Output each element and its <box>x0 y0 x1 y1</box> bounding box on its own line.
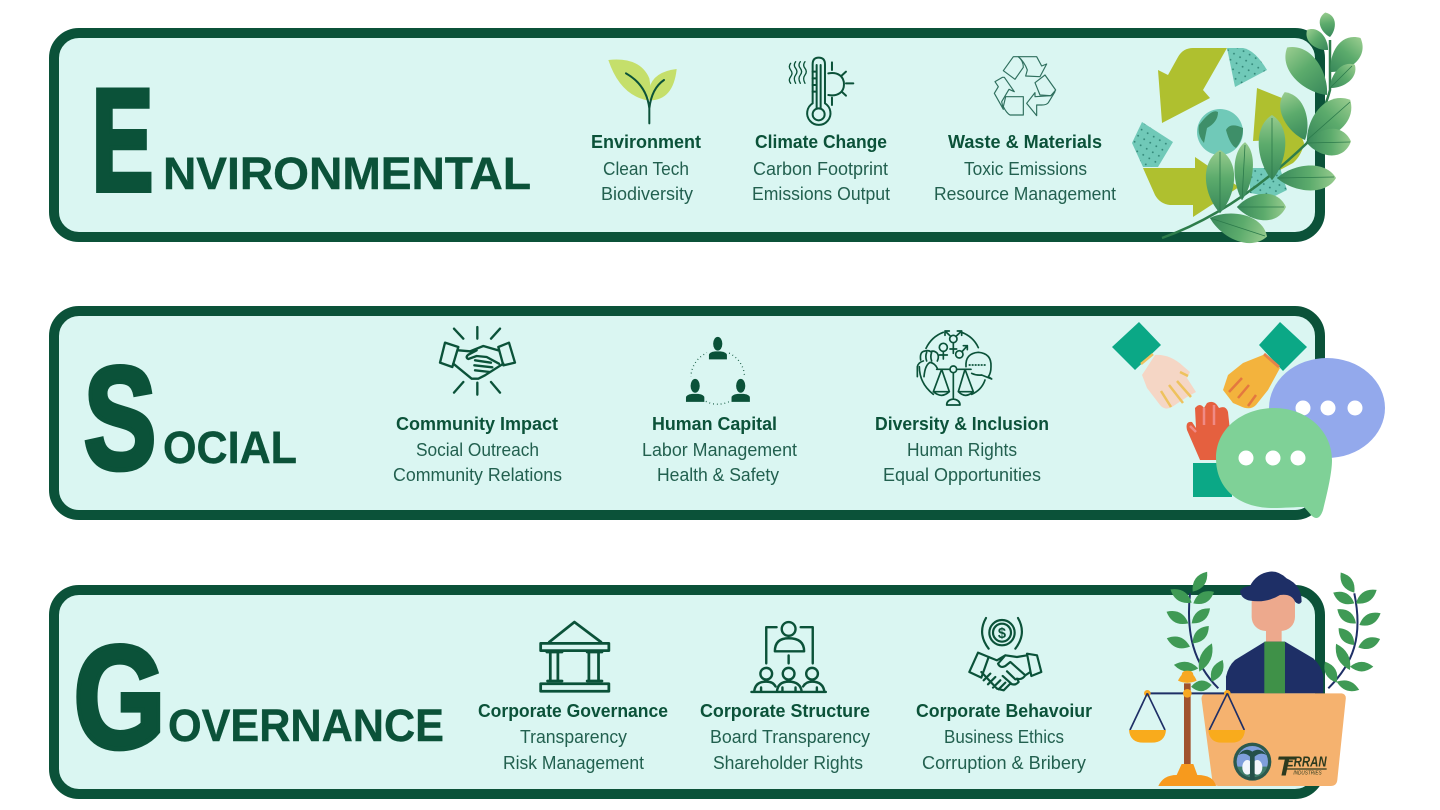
logo: Terran Industries <box>1233 743 1327 781</box>
text block: Human Capital: Labor Management <box>642 440 797 460</box>
text block: Corporate Governance: Risk Management <box>503 753 644 773</box>
heading: Social: S <box>84 336 156 500</box>
icon: three connected people <box>684 335 751 404</box>
icon: diversity scales and gender symbols <box>917 331 992 405</box>
text block: Community Impact: Social Outreach <box>416 440 539 460</box>
text block: Environment: Clean Tech <box>603 159 689 179</box>
text block: Corporate Behaviour: Corporate Behavoiur <box>916 701 1092 721</box>
heading: Social: OCIAL <box>163 422 297 473</box>
panel frame: environmental <box>54 33 1320 237</box>
panel: environmental <box>54 11 1370 249</box>
text block: Environment: Environment <box>591 132 701 152</box>
text block: Climate Change <box>752 132 890 204</box>
icon: government building <box>541 622 609 691</box>
heading: Governance: G <box>74 616 166 778</box>
text block: Corporate Behaviour: Business Ethics <box>944 727 1064 747</box>
text block: Diversity and Inclusion <box>875 414 1049 485</box>
panel frame: social <box>54 311 1320 515</box>
logo: Terran Industries: T <box>1276 750 1297 781</box>
heading: Environmental <box>92 58 531 222</box>
text block: Waste and Materials: Waste & Materials <box>948 132 1102 152</box>
text block: Diversity and Inclusion: Diversity & Inclusion <box>875 414 1049 434</box>
text block: Corporate Governance <box>478 701 668 773</box>
text block: Corporate Behaviour <box>916 701 1092 773</box>
icon: dollar coin and handshake: $ <box>998 626 1006 642</box>
icon: organisation structure <box>751 622 826 692</box>
panel: governance <box>54 569 1383 794</box>
icon: sprout <box>608 60 677 123</box>
text block: Corporate Behaviour: Corruption & Bribery <box>922 753 1086 773</box>
illustration: hands and speech bubbles <box>1112 322 1385 518</box>
text block: Diversity and Inclusion: Equal Opportunities <box>883 465 1041 485</box>
text block: Corporate Governance: Corporate Governance <box>478 701 668 721</box>
text block: Community Impact <box>393 414 562 485</box>
text block: Corporate Structure <box>700 701 870 773</box>
illustration: recycling arrows with globe and leaves <box>1132 11 1370 249</box>
panel frame: governance <box>54 590 1320 794</box>
text block: Waste and Materials <box>934 132 1116 204</box>
logo: Terran Industries: INDUSTRIES <box>1293 771 1322 777</box>
heading: Governance <box>74 616 444 778</box>
icon: dollar coin and handshake <box>969 618 1041 690</box>
icon: recycling symbol <box>994 57 1056 116</box>
text block: Human Capital: Health & Safety <box>657 465 779 485</box>
icon: handshake <box>440 327 515 395</box>
text block: Climate Change: Emissions Output <box>752 184 890 204</box>
text block: Waste and Materials: Toxic Emissions <box>964 159 1087 179</box>
text block: Environment <box>591 132 701 204</box>
text block: Climate Change: Climate Change <box>755 132 887 152</box>
text block: Community Impact: Community Impact <box>396 414 558 434</box>
panel: social <box>54 311 1385 518</box>
heading: Environmental: E <box>92 58 154 222</box>
heading: Governance: OVERNANCE <box>168 700 444 751</box>
heading: Social <box>84 336 297 500</box>
text block: Human Capital: Human Capital <box>652 414 777 434</box>
text block: Community Impact: Community Relations <box>393 465 562 485</box>
text block: Corporate Structure: Shareholder Rights <box>713 753 863 773</box>
text block: Corporate Governance: Transparency <box>520 727 627 747</box>
heading: Environmental: NVIRONMENTAL <box>163 148 531 199</box>
icon: thermometer and sun <box>789 58 853 125</box>
text block: Environment: Biodiversity <box>601 184 693 204</box>
illustration: executive at desk with scales and laurels <box>1129 569 1383 786</box>
text block: Corporate Structure: Corporate Structure <box>700 701 870 721</box>
text block: Diversity and Inclusion: Human Rights <box>907 440 1017 460</box>
logo: Terran Industries: ERRAN <box>1286 755 1327 771</box>
text block: Climate Change: Carbon Footprint <box>753 159 888 179</box>
text block: Corporate Structure: Board Transparency <box>710 727 870 747</box>
text block: Waste and Materials: Resource Management <box>934 184 1116 204</box>
text block: Human Capital <box>642 414 797 485</box>
